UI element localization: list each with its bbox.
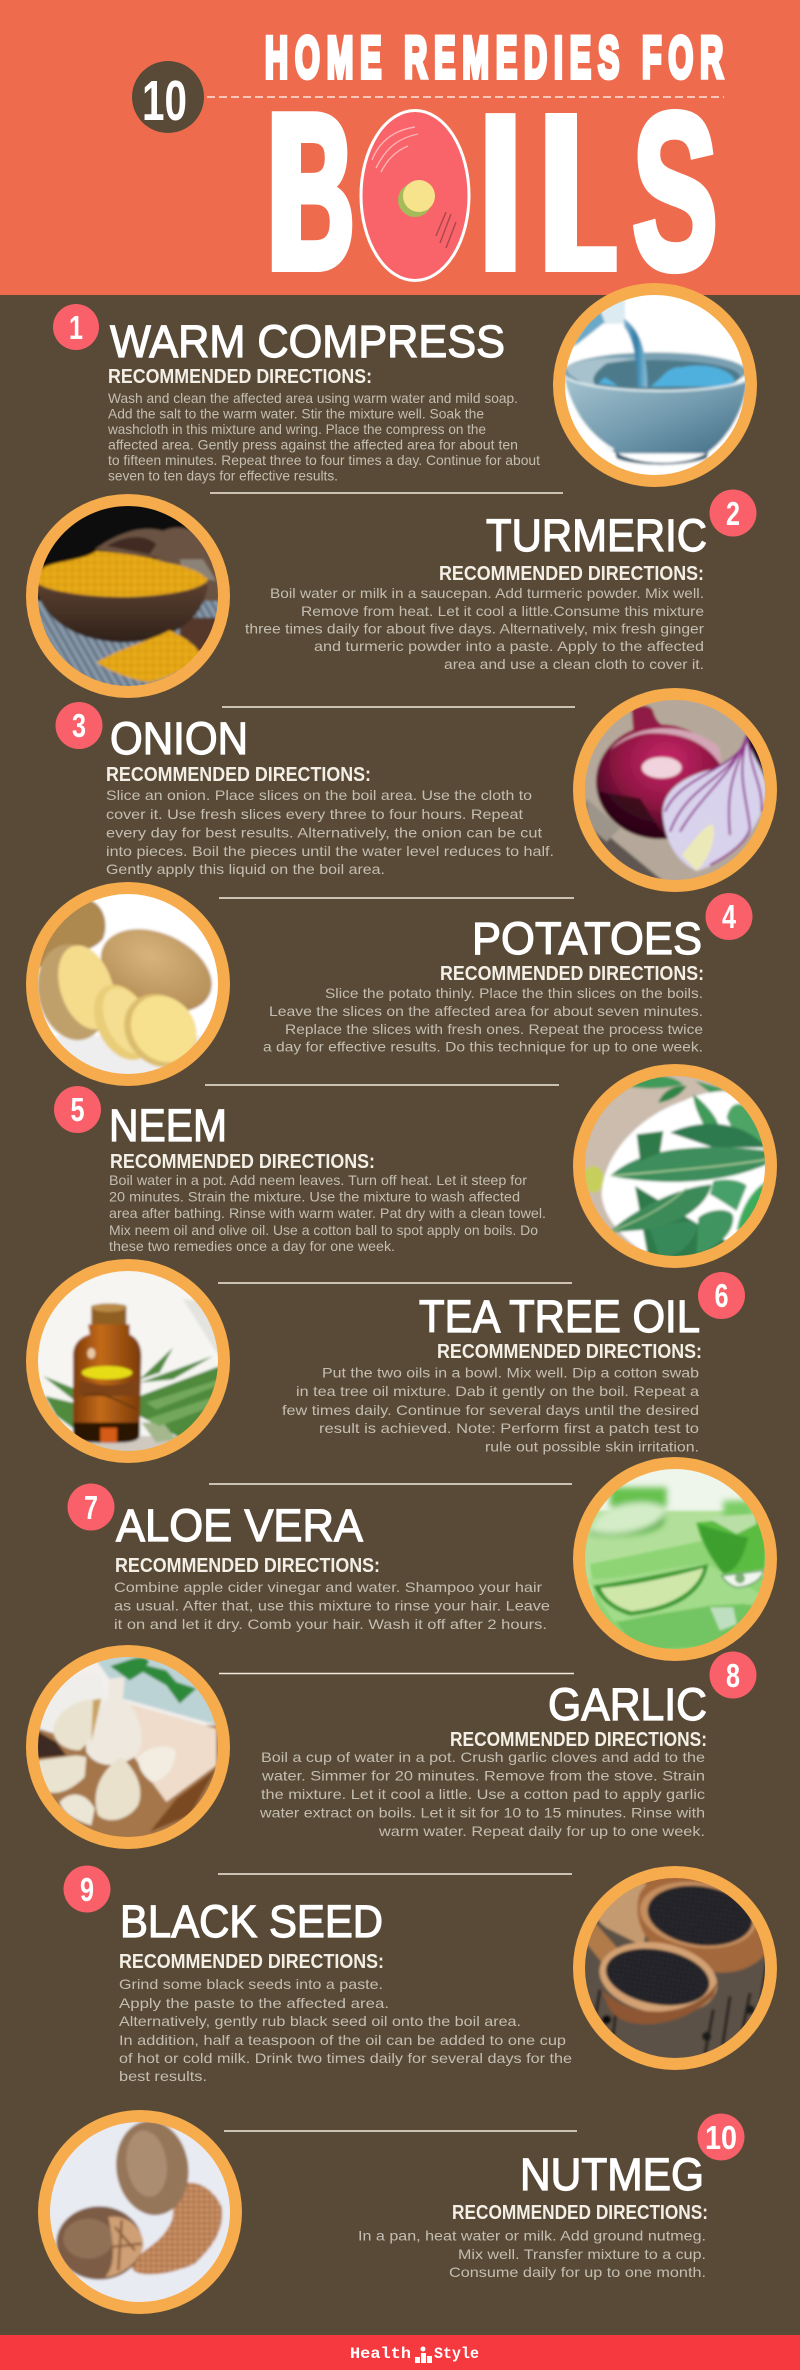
label: recommended directions: RECOMMENDED DIRECTIONS: [440,963,704,985]
title: boils [266,63,718,321]
directions text [109,1172,546,1254]
directions text: seven to ten days for effective results. [108,468,338,484]
title: boils: B [266,68,356,316]
badge 8: 8 [726,1657,740,1694]
photo: black seeds in wooden spoons [570,1863,780,2073]
directions text: warm water. Repeat daily for up to one week. [378,1823,705,1839]
badge 9 [64,1866,110,1912]
directions text: In addition, half a teaspoon of the oil can be added to one cup [119,2032,566,2048]
directions text: Add the salt to the warm water. Stir the mixture well. Soak the [108,406,484,422]
directions text: cover it. Use fresh slices every three to four hours. Repeat [106,806,523,822]
photo: water poured into bowl [550,280,760,490]
badge 8 [710,1652,756,1698]
photo: potatoes [23,879,233,1089]
directions text: affected area. Gently press against the affected area for about ten [108,436,518,452]
badge 7 [68,1484,114,1530]
directions text: Boil water in a pot. Add neem leaves. Turn off heat. Let it steep for [109,1172,527,1188]
directions text: Gently apply this liquid on the boil area. [106,861,385,877]
badge 10: 10 [705,2119,737,2156]
title: boils: S [632,68,718,316]
directions text: in tea tree oil mixture. Dab it gently on the boil. Repeat a [296,1383,699,1399]
directions text: Slice the potato thinly. Place the thin slices on the boils. [325,985,703,1001]
directions text: Alternatively, gently rub black seed oil onto the boil area. [119,2013,521,2029]
heading: turmeric: TURMERIC [486,510,707,561]
badge 6 [698,1272,745,1319]
directions text: Leave the slices on the affected area for about seven minutes. [269,1003,703,1019]
directions text: these two remedies once a day for one week. [109,1238,395,1254]
photo: nutmeg [35,2107,245,2317]
title: boils: O [372,63,460,321]
panel: onion [56,685,780,895]
heading: black seed: BLACK SEED [120,1896,383,1947]
badge 10 [698,2114,744,2160]
heading: aloe vera: ALOE VERA [116,1500,363,1551]
directions text: washcloth in this mixture and wring. Place the compress on the [107,421,486,437]
directions text: 20 minutes. Strain the mixture. Use the mixture to wash affected [109,1188,520,1204]
directions text: Mix neem oil and olive oil. Use a cotton ball to spot apply on boils. Do [109,1222,538,1238]
directions text: water extract on boils. Let it sit for 10 to 15 minutes. Rinse with [259,1804,705,1820]
directions text [282,1364,699,1454]
directions text: rule out possible skin irritation. [485,1438,699,1454]
heading: tea tree oil: TEA TREE OIL [419,1291,700,1342]
directions text: Combine apple cider vinegar and water. Shampoo your hair [114,1579,542,1595]
label: recommended directions: RECOMMENDED DIRECTIONS: [452,2202,708,2224]
badge 4: 4 [722,898,736,935]
directions text: to fifteen minutes. Repeat three to four times a day. Continue for about [108,452,540,468]
label: recommended directions: RECOMMENDED DIRECTIONS: [115,1555,380,1577]
directions text: Slice an onion. Place slices on the boil area. Use the cloth to [106,787,532,803]
footer logo: Health Style: Health [350,2345,411,2363]
badge 6: 6 [714,1277,728,1314]
panel: garlic [23,1642,756,1852]
directions text [245,585,704,672]
label: recommended directions: RECOMMENDED DIRECTIONS: [437,1341,702,1363]
directions text [119,1976,572,2084]
panel: turmeric [23,490,756,701]
directions text: Grind some black seeds into a paste. [119,1976,383,1992]
directions text [114,1579,550,1632]
directions text: Boil a cup of water in a pot. Crush garlic cloves and add to the [261,1749,705,1765]
label: recommended directions: RECOMMENDED DIRECTIONS: [439,563,704,585]
label: recommended directions: RECOMMENDED DIRECTIONS: [106,764,371,786]
badge 3 [56,702,102,749]
directions text [358,2228,706,2280]
directions text: Consume daily for up to one month. [449,2264,706,2280]
directions text: few times daily. Continue for several days until the desired [282,1402,699,1418]
directions text: area after bathing. Rinse with warm water. Pat dry with a clean towel. [109,1205,546,1221]
footer bar [0,2335,800,2370]
badge 5: 5 [70,1091,84,1128]
directions text: the mixture. Let it cool a little. Use a cotton pad to apply garlic [261,1786,705,1802]
directions text [106,787,554,877]
directions text [259,1749,705,1839]
heading: neem: NEEM [109,1100,227,1151]
label: recommended directions: RECOMMENDED DIRECTIONS: [110,1151,375,1173]
directions text: Mix well. Transfer mixture to a cup. [458,2246,706,2262]
badge 1 [53,304,99,350]
directions text: In a pan, heat water or milk. Add ground nutmeg. [358,2228,706,2244]
directions text [263,985,703,1054]
directions text: every day for best results. Alternatively, the onion can be cut [106,824,542,840]
label: recommended directions: RECOMMENDED DIRECTIONS: [108,366,372,388]
directions text: water. Simmer for 20 minutes. Remove from the stove. Strain [261,1768,705,1784]
directions text: as usual. After that, use this mixture to rinse your hair. Leave [114,1598,550,1614]
badge 4 [706,893,752,940]
title: boils: L [536,63,621,321]
panel: aloe vera [68,1454,780,1664]
badge 5 [54,1086,101,1133]
heading: nutmeg: NUTMEG [520,2149,704,2200]
panel: warm compress [53,280,760,490]
badge 3: 3 [72,707,86,744]
heading: onion: ONION [110,713,248,764]
directions text: Wash and clean the affected area using warm water and mild soap. [108,390,518,406]
panel: black seed [64,1863,780,2084]
directions text: Boil water or milk in a saucepan. Add turmeric powder. Mix well. [270,585,704,601]
directions text [107,390,540,484]
directions text: into pieces. Boil the pieces until the water level reduces to half. [106,843,554,859]
label: recommended directions: RECOMMENDED DIRECTIONS: [450,1729,707,1751]
footer logo: Health Style: Style [434,2345,479,2363]
directions text: and turmeric powder into a paste. Apply to the affected [314,638,704,654]
directions text: best results. [119,2068,207,2084]
directions text: of hot or cold milk. Drink two times daily for several days for the [119,2050,572,2066]
directions text: Put the two oils in a bowl. Mix well. Dip a cotton swab [322,1364,699,1380]
icon: boil on skin [361,110,469,280]
footer logo: Health Style [350,2345,479,2363]
panel: potatoes [23,879,752,1089]
title: home remedies for: HOME REMEDIES FOR [265,25,723,90]
badge 7: 7 [84,1489,98,1526]
photo: aloe vera slices [570,1454,780,1664]
directions text: Apply the paste to the affected area. [119,1995,389,2011]
badge 2: 2 [726,495,740,532]
heading: potatoes: POTATOES [472,913,702,964]
badge: number 10: 10 [142,69,187,133]
directions text: result is achieved. Note: Perform first a patch test to [319,1420,699,1436]
badge 9: 9 [80,1871,94,1908]
photo: neem leaves [570,1061,780,1271]
header banner [0,0,800,321]
badge 2 [710,490,756,536]
photo: tea tree oil bottle [23,1256,233,1466]
directions text: Remove from heat. Let it cool a little.Consume this mixture [301,603,704,619]
photo: red onion [570,685,780,895]
panel: nutmeg [35,2107,744,2317]
photo: garlic [23,1642,233,1852]
directions text: a day for effective results. Do this technique for up to one week. [263,1038,703,1054]
directions text: three times daily for about five days. Alternatively, mix fresh ginger [245,620,704,636]
panel: tea tree oil [23,1256,745,1466]
title: boils: I [472,63,530,321]
heading: garlic: GARLIC [548,1679,707,1730]
label: recommended directions: RECOMMENDED DIRECTIONS: [119,1951,384,1973]
heading: warm compress: WARM COMPRESS [110,316,505,367]
photo: turmeric bowl [23,491,233,701]
directions text: area and use a clean cloth to cover it. [444,656,704,672]
panel: neem [54,1061,780,1271]
directions text: Replace the slices with fresh ones. Repeat the process twice [285,1021,703,1037]
badge 1: 1 [69,309,83,346]
directions text: it on and let it dry. Comb your hair. Wash it off after 2 hours. [114,1616,547,1632]
